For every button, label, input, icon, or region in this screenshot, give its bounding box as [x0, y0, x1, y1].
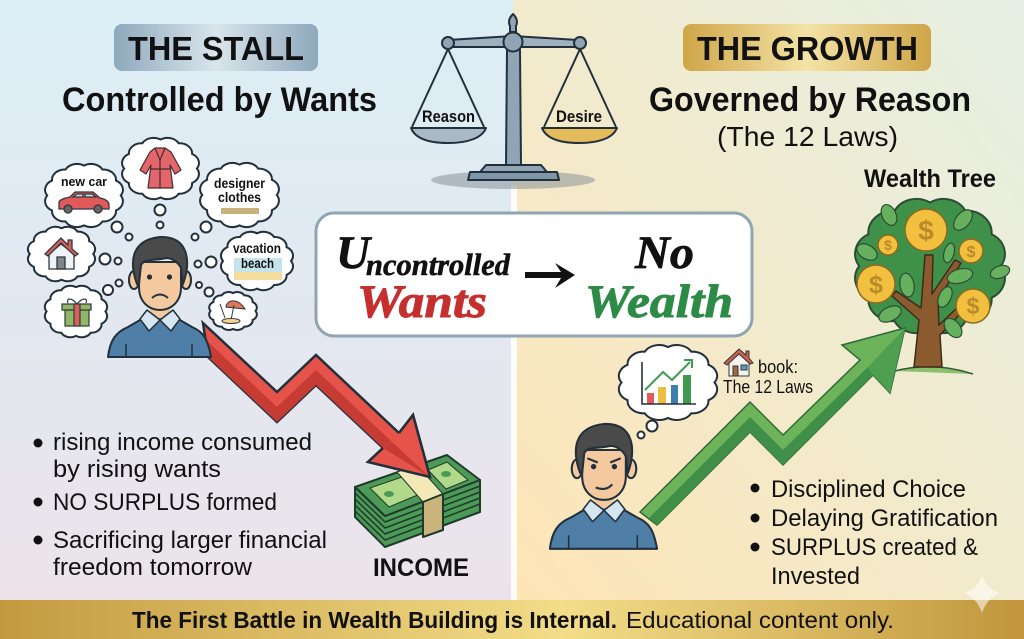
icon: balance scale	[411, 14, 617, 189]
icon: bar chart	[642, 360, 696, 404]
text: new car: new car	[61, 174, 107, 189]
text: footer disclaimer: Educational content only.	[626, 607, 894, 633]
footer banner	[0, 600, 1024, 639]
heading: the stall: THE STALL	[128, 30, 304, 67]
text: dollar on left coin: $	[869, 271, 883, 299]
bullet list: stall effects: freedom tomorrow	[53, 554, 253, 581]
subheading: governed by reason: Governed by Reason	[649, 81, 971, 119]
image: beach	[234, 258, 282, 280]
text: wealth: Wealth	[585, 276, 733, 328]
bullet list: growth effects: Delaying Gratification	[771, 505, 998, 532]
bullet list: stall effects: NO SURPLUS formed	[53, 489, 277, 516]
icon: clothing trim	[221, 208, 259, 214]
figure: confident man	[550, 424, 657, 549]
subheading: the 12 laws: (The 12 Laws)	[717, 121, 898, 152]
thought bubble trail dots	[100, 204, 216, 296]
arrow: red arrow head over cash	[368, 415, 430, 477]
label: wealth tree: Wealth Tree	[864, 165, 996, 193]
icon: coat	[140, 148, 181, 188]
bullet list: stall effects: by rising wants	[53, 456, 221, 483]
thought cloud: vacation beach	[221, 232, 293, 290]
text: beach: beach	[241, 255, 274, 271]
text: dollar on small coin: $	[884, 237, 892, 253]
thought cloud: house	[28, 227, 95, 281]
text: uncontrolled: U	[336, 227, 372, 279]
text: dollar on large coin: $	[918, 215, 934, 246]
text: wants: Wants	[357, 276, 487, 328]
text: clothes: clothes	[218, 189, 261, 205]
arrow: leads to	[525, 263, 575, 288]
subheading: controlled by wants: Controlled by Wants	[62, 81, 377, 119]
thought cloud: designer clothes	[200, 163, 279, 227]
text: vacation: vacation	[233, 240, 281, 256]
icon: cash stack	[355, 455, 480, 547]
text: dollar on lower coin: $	[967, 293, 980, 319]
label: income: INCOME	[373, 554, 469, 582]
icon: wealth tree	[854, 199, 1011, 374]
icon: small house	[724, 349, 753, 376]
thought cloud: umbrella	[209, 292, 257, 330]
background: right growth panel	[513, 0, 1024, 600]
panel: central equation	[316, 213, 752, 336]
label: reason: Reason	[422, 107, 475, 126]
text: no: No	[634, 227, 694, 279]
text: the 12 laws: The 12 Laws	[723, 377, 813, 397]
arrow: falling red income arrow	[203, 323, 430, 477]
icon: beach umbrella	[220, 301, 245, 324]
text: dollar on right coin: $	[967, 244, 976, 261]
thought cloud: coat	[122, 138, 199, 199]
text: footer bold message: The First Battle in Wealth Building is Internal.	[132, 607, 617, 633]
bullet list: growth effects	[750, 476, 998, 590]
thought cloud: growth chart	[619, 345, 717, 438]
bullet list: growth effects: SURPLUS created &	[771, 534, 978, 561]
icon: sparkle	[964, 575, 1000, 613]
text: designer: designer	[214, 175, 265, 191]
icon: car	[59, 192, 109, 213]
thought cloud: new car	[45, 164, 123, 227]
bullet list: growth effects: Invested	[771, 563, 860, 590]
text: book: book:	[758, 357, 798, 377]
figure: worried man	[108, 237, 211, 357]
background: left stall panel	[0, 0, 513, 600]
bullet list: stall effects: Sacrificing larger financial	[53, 527, 327, 554]
bullet list: stall effects: rising income consumed	[53, 429, 312, 456]
icon: gift	[62, 299, 91, 326]
heading: the growth: THE GROWTH	[697, 30, 918, 67]
heading: the stall	[114, 24, 318, 71]
arrow: rising green arrow	[640, 328, 905, 525]
bullet list: growth effects: Disciplined Choice	[771, 476, 966, 503]
label: desire: Desire	[556, 107, 602, 126]
icon: house	[45, 238, 78, 269]
text: ncontrolled: ncontrolled	[366, 247, 510, 282]
thought cloud: gift	[45, 286, 107, 337]
bullet list: stall effects	[34, 429, 327, 581]
